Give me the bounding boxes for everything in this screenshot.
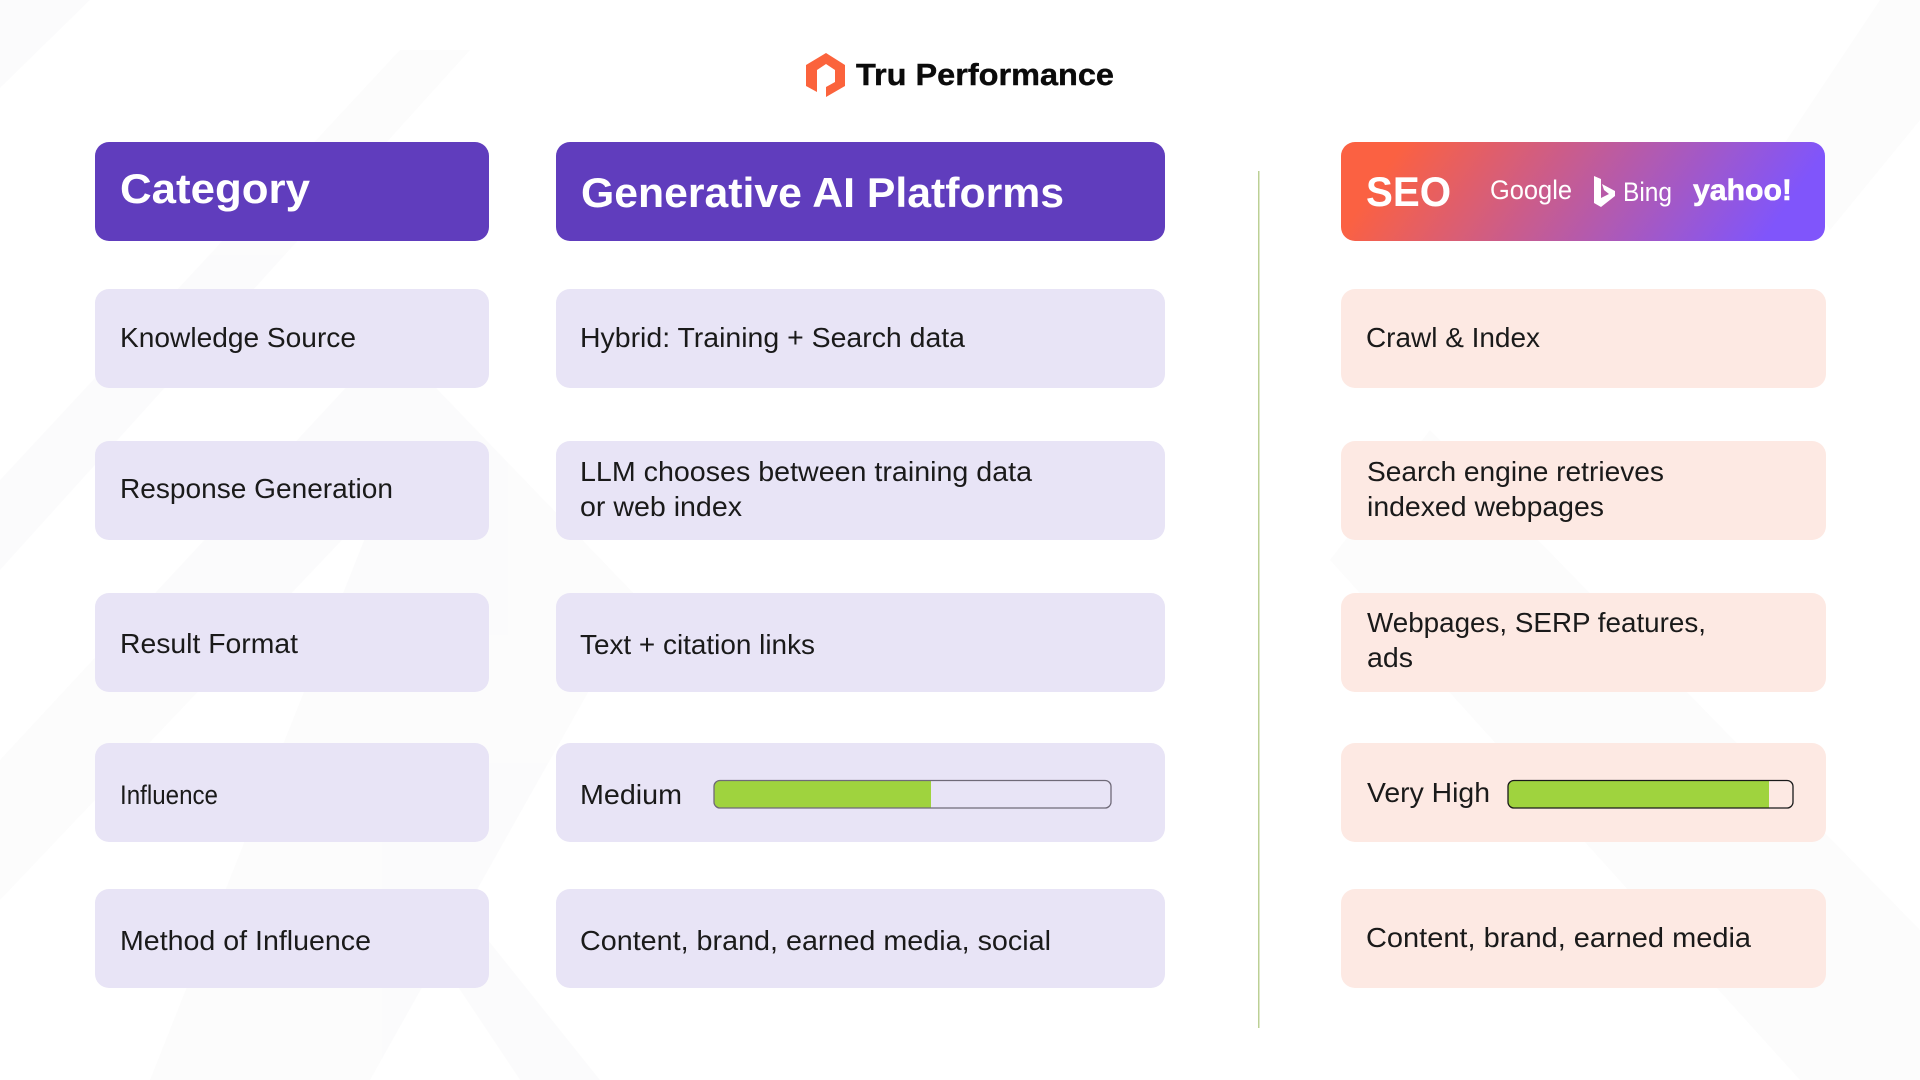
cell: influence very high: Very High — [1367, 777, 1490, 808]
heading: SEO with search engines — [1341, 142, 1825, 241]
cell: response generation: indexed webpages — [1367, 491, 1604, 522]
heading: Category — [95, 142, 489, 241]
cell: result format — [1341, 593, 1826, 692]
row label: Influence: Influence — [120, 780, 218, 810]
row label: Result Format — [95, 593, 489, 692]
cell: response generation: Search engine retrieves — [1367, 456, 1664, 487]
cell: method of influence — [556, 889, 1165, 988]
cell: knowledge source — [1341, 289, 1826, 388]
row label: Method of Influence: Method of Influence — [120, 925, 371, 956]
cell: response generation: or web index — [580, 491, 742, 522]
row label: Knowledge Source: Knowledge Source — [120, 322, 356, 353]
column: generative AI platforms — [556, 142, 1165, 988]
heading: Generative AI Platforms — [556, 142, 1165, 241]
cell: method of influence: Content, brand, earned media — [1366, 922, 1751, 953]
cell: result format: Webpages, SERP features, — [1367, 607, 1706, 638]
row label: Knowledge Source — [95, 289, 489, 388]
cell: result format — [556, 593, 1165, 692]
cell: influence medium: Medium — [580, 779, 682, 810]
column: SEO — [1341, 142, 1826, 988]
cell: method of influence: Content, brand, earned media, social — [580, 925, 1051, 956]
heading: SEO with search engines: yahoo! — [1693, 174, 1792, 207]
row label: Response Generation: Response Generation — [120, 473, 393, 504]
cell: influence very high — [1341, 743, 1826, 842]
heading: SEO with search engines: SEO — [1366, 168, 1451, 215]
cell: method of influence — [1341, 889, 1826, 988]
row label: Result Format: Result Format — [120, 628, 298, 659]
cell: knowledge source: Hybrid: Training + Search data — [580, 322, 965, 353]
logo: Tru Performance — [856, 57, 1114, 92]
progress bar: very high — [1508, 780, 1793, 808]
cell: result format: ads — [1367, 642, 1413, 673]
heading: Category: Category — [120, 165, 311, 212]
progress bar: medium — [714, 780, 1111, 808]
cell: influence medium — [556, 743, 1165, 842]
icon: hexagon logo mark — [806, 53, 845, 97]
column: category — [95, 142, 489, 988]
cell: result format: Text + citation links — [580, 629, 815, 660]
row label: Influence — [95, 743, 489, 842]
row label: Response Generation — [95, 441, 489, 540]
cell: knowledge source: Crawl & Index — [1366, 322, 1540, 353]
logo — [806, 53, 1114, 97]
heading: SEO with search engines: Bing — [1623, 177, 1672, 207]
heading: Generative AI Platforms: Generative AI Platforms — [581, 169, 1064, 216]
cell: response generation — [556, 441, 1165, 540]
icon: Bing — [1594, 176, 1615, 207]
cell: response generation — [1341, 441, 1826, 540]
heading: SEO with search engines: Google — [1490, 175, 1572, 205]
cell: response generation: LLM chooses between training data — [580, 456, 1032, 487]
cell: knowledge source — [556, 289, 1165, 388]
row label: Method of Influence — [95, 889, 489, 988]
